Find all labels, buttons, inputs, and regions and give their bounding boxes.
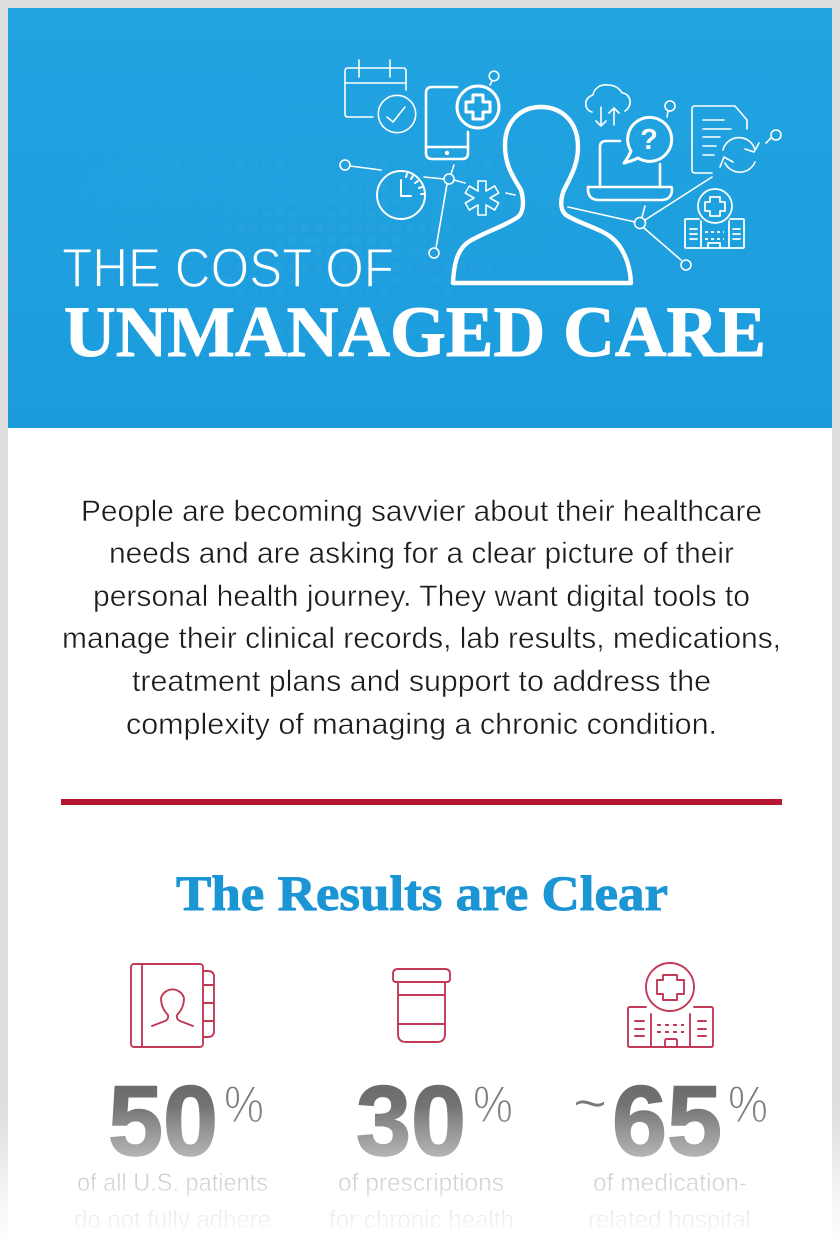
caption: for chronic health: [329, 1206, 514, 1234]
white content panel: [8, 428, 832, 1260]
icon: hospital, header: [685, 189, 744, 248]
title line two: UNMANAGED CARE: [64, 292, 766, 372]
network lines and nodes, left: [340, 160, 515, 258]
caption: of prescriptions: [338, 1169, 504, 1197]
caption: [329, 1169, 514, 1234]
intro paragraph: People are becoming savvier about their healthcare: [81, 495, 762, 528]
caption: of medication-: [593, 1169, 747, 1197]
intro paragraph: treatment plans and support to address the: [132, 665, 711, 698]
icon: medical asterisk: [465, 181, 499, 215]
figure: about 65 percent: ~: [573, 1071, 607, 1134]
intro paragraph: [62, 495, 781, 741]
divider bar: [61, 799, 782, 805]
icon: cloud with arrows: [586, 85, 675, 126]
figure: about 65 percent: [573, 1065, 768, 1176]
caption: of all U.S. patients: [77, 1169, 268, 1197]
section heading: The Results are Clear: [176, 865, 668, 921]
icon: laptop with question bubble: ?: [640, 124, 658, 156]
figure: 50 percent: 50: [108, 1065, 218, 1176]
bottom white fade: [0, 1105, 840, 1240]
icon: phone with medical cross: [426, 71, 499, 159]
figure: about 65 percent: 65: [612, 1065, 722, 1176]
header banner: [8, 8, 832, 428]
stat column: prescriptions: [329, 969, 514, 1234]
caption: related hospital: [588, 1206, 751, 1234]
title line one: THE COST OF: [62, 236, 394, 299]
intro paragraph: manage their clinical records, lab results, medications,: [62, 622, 781, 655]
intro paragraph: needs and are asking for a clear picture of their: [109, 537, 734, 570]
icon: pill bottle: [393, 969, 450, 1042]
network lines and nodes, right: [568, 177, 712, 270]
icon: address book: [131, 964, 214, 1047]
caption: [588, 1169, 751, 1234]
icon: calendar with check: [345, 60, 416, 133]
intro paragraph: complexity of managing a chronic condition.: [126, 708, 717, 741]
icon: clock: [377, 171, 425, 219]
figure: 30 percent: %: [473, 1076, 513, 1134]
icon: hospital: [628, 963, 713, 1047]
figure: 30 percent: 30: [356, 1065, 466, 1176]
stat column: patients: [74, 964, 271, 1234]
caption: [74, 1169, 271, 1234]
icon: person silhouette: [453, 107, 631, 283]
figure: about 65 percent: %: [728, 1076, 768, 1134]
icon: laptop with question bubble: [588, 117, 672, 200]
stat column: hospital: [573, 963, 768, 1234]
caption: do not fully adhere: [74, 1206, 271, 1234]
icon: document with refresh arrows: [692, 106, 781, 173]
figure: 50 percent: %: [224, 1076, 264, 1134]
intro paragraph: personal health journey. They want digital tools to: [93, 580, 750, 613]
